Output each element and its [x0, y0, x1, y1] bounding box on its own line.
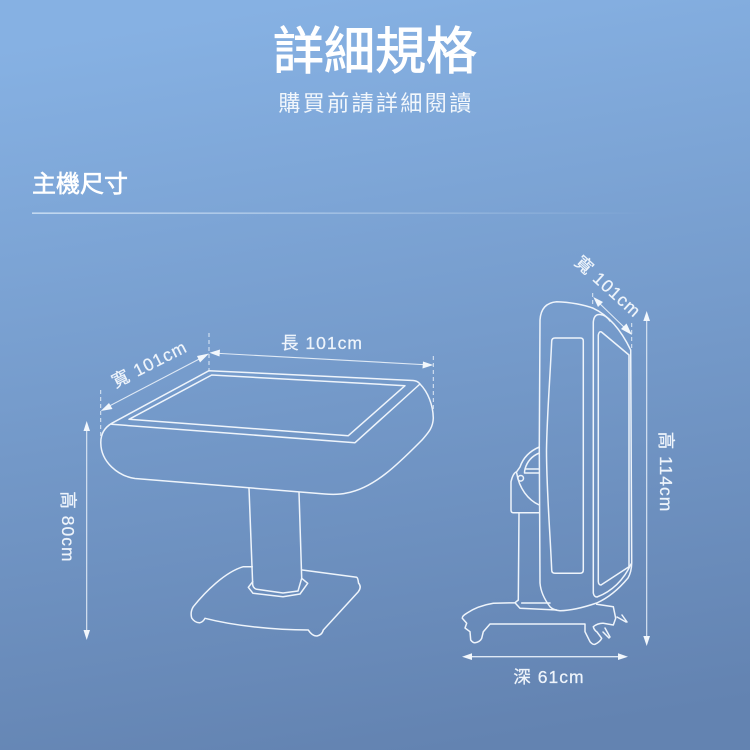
- dimension: length 101cm: 長 101cm: [281, 333, 363, 353]
- side body outline: [539, 302, 632, 611]
- wheeled base: [462, 600, 616, 644]
- dimension: height 80cm: [58, 421, 90, 640]
- dimension: length 101cm: [210, 333, 433, 410]
- hinge: [511, 447, 539, 513]
- dimension: height 114cm: [643, 311, 676, 646]
- table base: [191, 567, 360, 636]
- subtitle: 購買前請詳細閱讀: [278, 91, 474, 116]
- right screen: [598, 332, 629, 585]
- section divider: [32, 212, 652, 214]
- dimension: depth 61cm: 深 61cm: [513, 667, 585, 687]
- table body outline: [101, 371, 433, 494]
- hinge pin: [518, 476, 524, 481]
- pedestal collar: [248, 578, 308, 597]
- table front edge: [112, 384, 420, 443]
- title: 詳細規格: [273, 23, 477, 80]
- wheel brakes: [603, 615, 627, 638]
- dimension: height 114cm: 高 114cm: [656, 432, 676, 512]
- rear panel line: [593, 314, 631, 597]
- table top screen: [129, 375, 405, 436]
- section heading: 主機尺寸: [32, 171, 128, 198]
- side view drawing: folded table: [462, 302, 632, 644]
- support post: [518, 513, 550, 603]
- dimension: depth 61cm: [462, 653, 628, 687]
- dimension: width 101cm right: 寬 101cm: [571, 252, 645, 321]
- dimension: width 101cm left: [101, 333, 209, 440]
- dimension: height 80cm: 高 80cm: [58, 491, 78, 563]
- dimension: width 101cm left: 寬 101cm: [108, 337, 190, 392]
- left screen: [546, 338, 583, 573]
- pedestal column: [249, 488, 302, 593]
- table drawing: front view: [101, 371, 433, 636]
